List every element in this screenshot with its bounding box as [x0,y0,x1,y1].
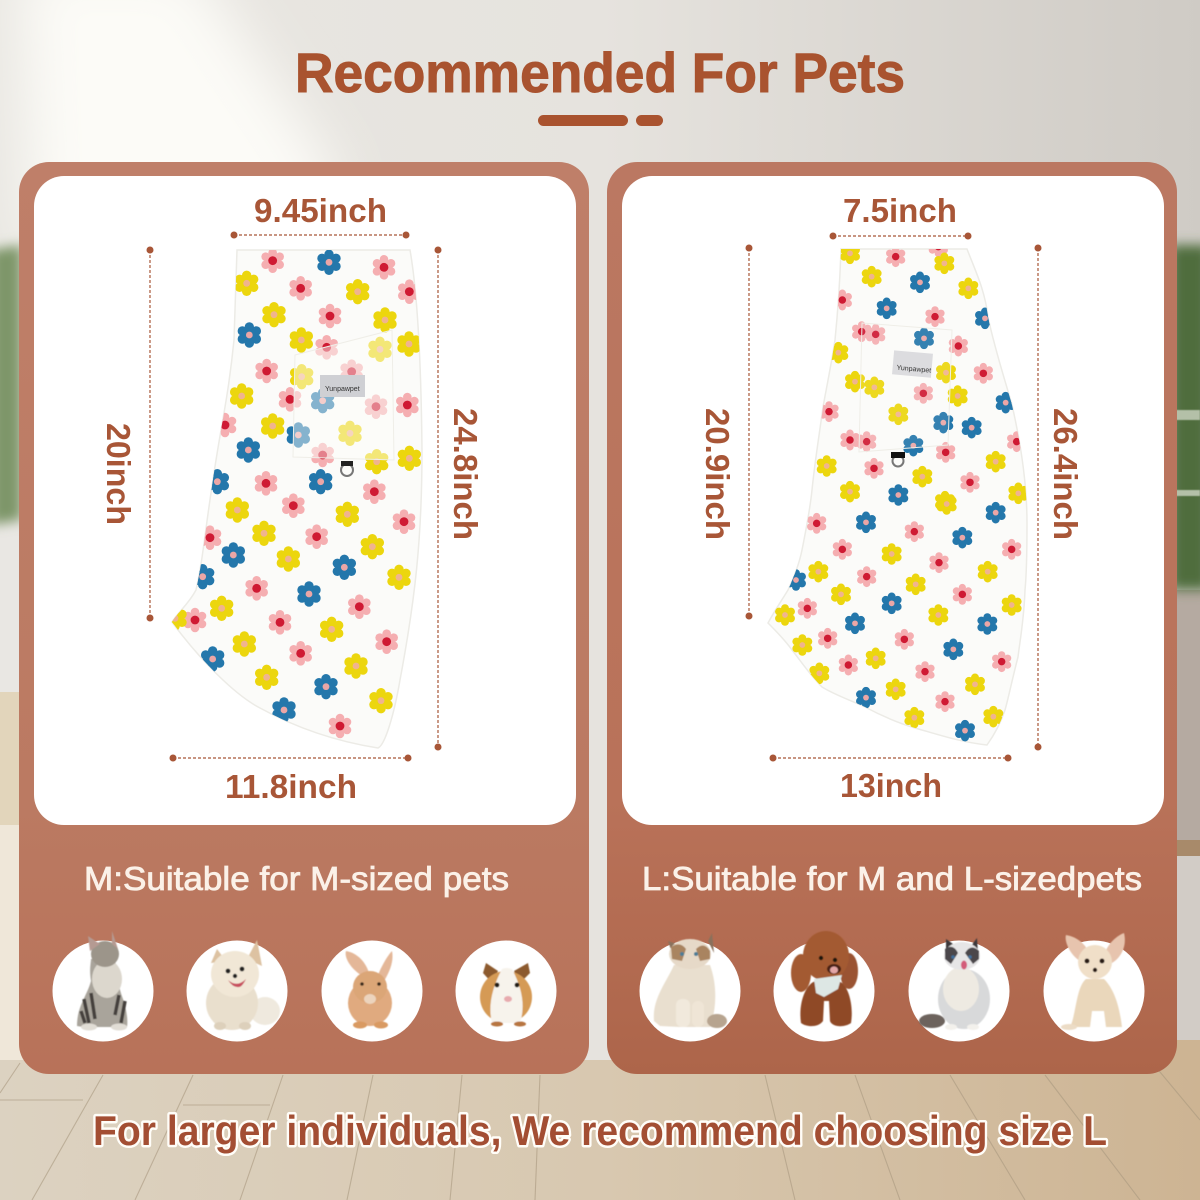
title: Recommended For Pets [295,41,905,104]
pocket M [293,330,394,476]
white card M [34,176,576,825]
dimension bottom L [770,754,1012,804]
panel background L [607,162,1177,1074]
pet: chihuahua [1044,933,1144,1042]
caption L: L:Suitable for M and L-sizedpets [642,860,1142,897]
title underline [538,115,663,126]
dimension left L [699,244,752,620]
pocket L [859,323,952,466]
pet: rabbit [322,940,422,1042]
pet: grey ragdoll cat [908,938,1010,1042]
dimension right M: 24.8inch [447,408,484,540]
dimension left L: 20.9inch [699,408,736,540]
bottom recommendation text: For larger individuals, We recommend choosing size L [93,1107,1107,1154]
dimension top L [830,192,972,240]
dimension bottom M: 11.8inch [225,768,357,805]
pet: ragdoll cat [640,933,740,1042]
panel: size L [607,162,1177,1074]
dimension right L: 26.4inch [1047,408,1084,540]
dimension top L: 7.5inch [843,192,957,229]
pocket L: Yunpawpet [896,365,931,375]
pet: kitten [52,931,154,1042]
caption M: M:Suitable for M-sized pets [84,860,509,897]
pet: guinea pig [456,940,556,1042]
garment L [768,236,1028,745]
dimension left M [100,246,154,622]
dimension left M: 20inch [100,423,137,525]
garment M [163,248,422,748]
pocket M: Yunpawpet [325,386,360,393]
dimension bottom L: 13inch [840,767,942,804]
pet: poodle [774,931,874,1042]
panel: size M [19,162,589,1074]
dimension top M [230,192,410,238]
white card L [622,176,1164,825]
dimension right L [1034,244,1084,750]
pet: pomeranian [186,940,288,1042]
dimension top M: 9.45inch [254,192,387,229]
dimension right M [434,246,484,750]
panel background M [19,162,589,1074]
dimension bottom M [170,754,412,805]
